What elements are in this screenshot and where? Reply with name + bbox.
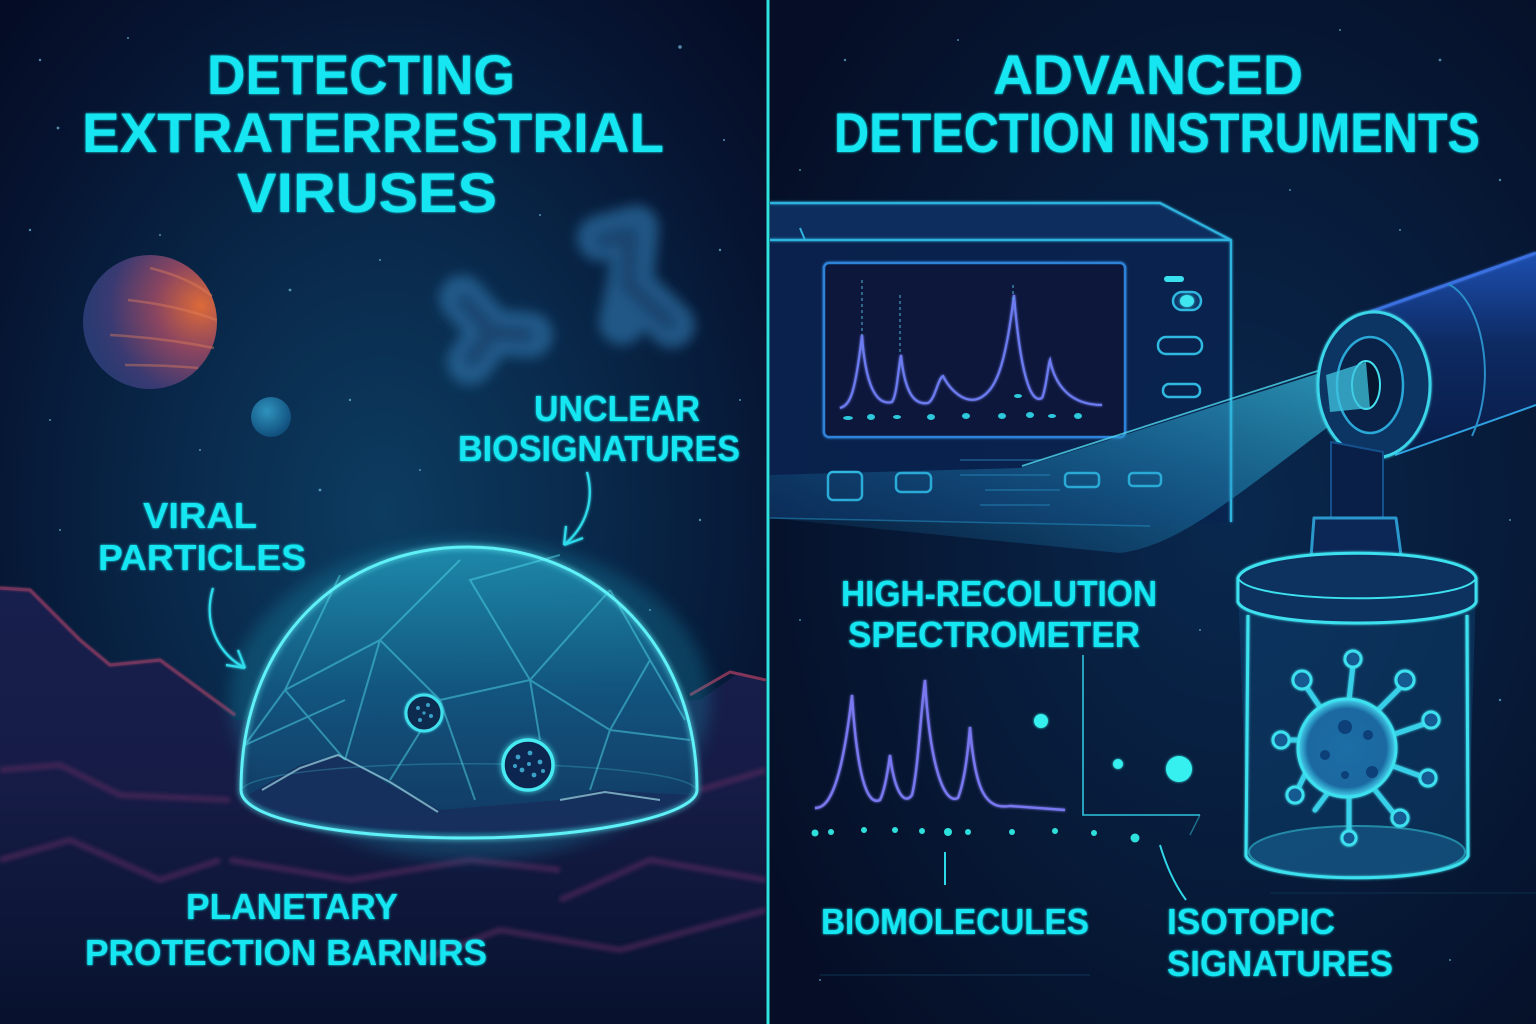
control panel buttons bbox=[828, 276, 1202, 500]
title: detecting extraterrestrial viruses: DETECTING bbox=[207, 43, 515, 106]
title: detecting extraterrestrial viruses bbox=[84, 53, 664, 214]
sample jar with virus bbox=[1238, 553, 1476, 878]
panel: advanced detection instruments bbox=[770, 0, 1536, 1024]
title: advanced detection instruments: ADVANCED bbox=[993, 43, 1303, 106]
spectrometer screen bbox=[824, 263, 1125, 437]
jar lid bbox=[1238, 553, 1476, 623]
viral particle: small bbox=[406, 695, 442, 731]
label: unclear biosignatures: UNCLEAR bbox=[534, 388, 700, 429]
scatter points bbox=[1034, 714, 1192, 782]
arrow: unclear biosignatures to dome bbox=[564, 472, 590, 545]
starfield right bbox=[799, 29, 1511, 981]
alien mountains and ground bbox=[0, 588, 766, 1024]
label: high-resolution spectrometer: SPECTROMETER bbox=[848, 614, 1140, 655]
label: high-resolution spectrometer: HIGH-RECOLUTION bbox=[841, 573, 1157, 614]
spectrometer housing bbox=[770, 203, 1231, 526]
screen data dots bbox=[843, 394, 1082, 420]
label: isotopic signatures: ISOTOPIC bbox=[1167, 901, 1335, 942]
planetary protection dome bbox=[230, 540, 710, 860]
label: planetary protection barriers: PLANETARY bbox=[186, 886, 398, 927]
label: planetary protection barriers: PROTECTION BARNIRS bbox=[85, 932, 487, 973]
blurred viral particle clouds bbox=[462, 228, 672, 362]
label: isotopic signatures bbox=[1166, 906, 1394, 978]
title: detecting extraterrestrial viruses: VIRUSES bbox=[237, 161, 497, 224]
center divider bbox=[766, 0, 770, 1024]
label: viral particles: PARTICLES bbox=[98, 537, 306, 578]
light beam bbox=[770, 365, 1345, 553]
laser tube bbox=[1318, 253, 1536, 458]
virus icon bbox=[1273, 651, 1439, 845]
label: unclear biosignatures: BIOSIGNATURES bbox=[458, 428, 740, 469]
dome inner terrain bbox=[248, 755, 690, 832]
geodesic lattice bbox=[245, 555, 690, 800]
starfield left bbox=[29, 37, 741, 611]
chart data dots bbox=[812, 827, 1140, 842]
title: advanced detection instruments bbox=[835, 53, 1480, 154]
planet: small blue moon bbox=[251, 397, 291, 437]
label: high-resolution spectrometer bbox=[841, 578, 1157, 650]
viral particle: large bbox=[503, 740, 553, 790]
planet: banded orange bbox=[83, 255, 217, 389]
sample jar stem bbox=[1310, 440, 1402, 554]
arrow: viral particles to dome bbox=[210, 588, 245, 668]
scatter axes bbox=[1083, 655, 1200, 815]
panel: detecting extraterrestrial viruses bbox=[0, 0, 766, 1024]
title: detecting extraterrestrial viruses: EXTRATERRESTRIAL bbox=[82, 101, 664, 164]
screen spectrum trace bbox=[840, 295, 1102, 408]
label: viral particles bbox=[98, 501, 306, 572]
label: biomolecules: BIOMOLECULES bbox=[821, 901, 1089, 942]
label: isotopic signatures: SIGNATURES bbox=[1167, 943, 1393, 984]
label: viral particles: VIRAL bbox=[143, 495, 257, 536]
lens ring bbox=[1318, 312, 1430, 458]
label: planetary protection barriers bbox=[85, 892, 488, 968]
lower spectrum chart bbox=[812, 655, 1200, 900]
label: unclear biosignatures bbox=[458, 394, 741, 464]
